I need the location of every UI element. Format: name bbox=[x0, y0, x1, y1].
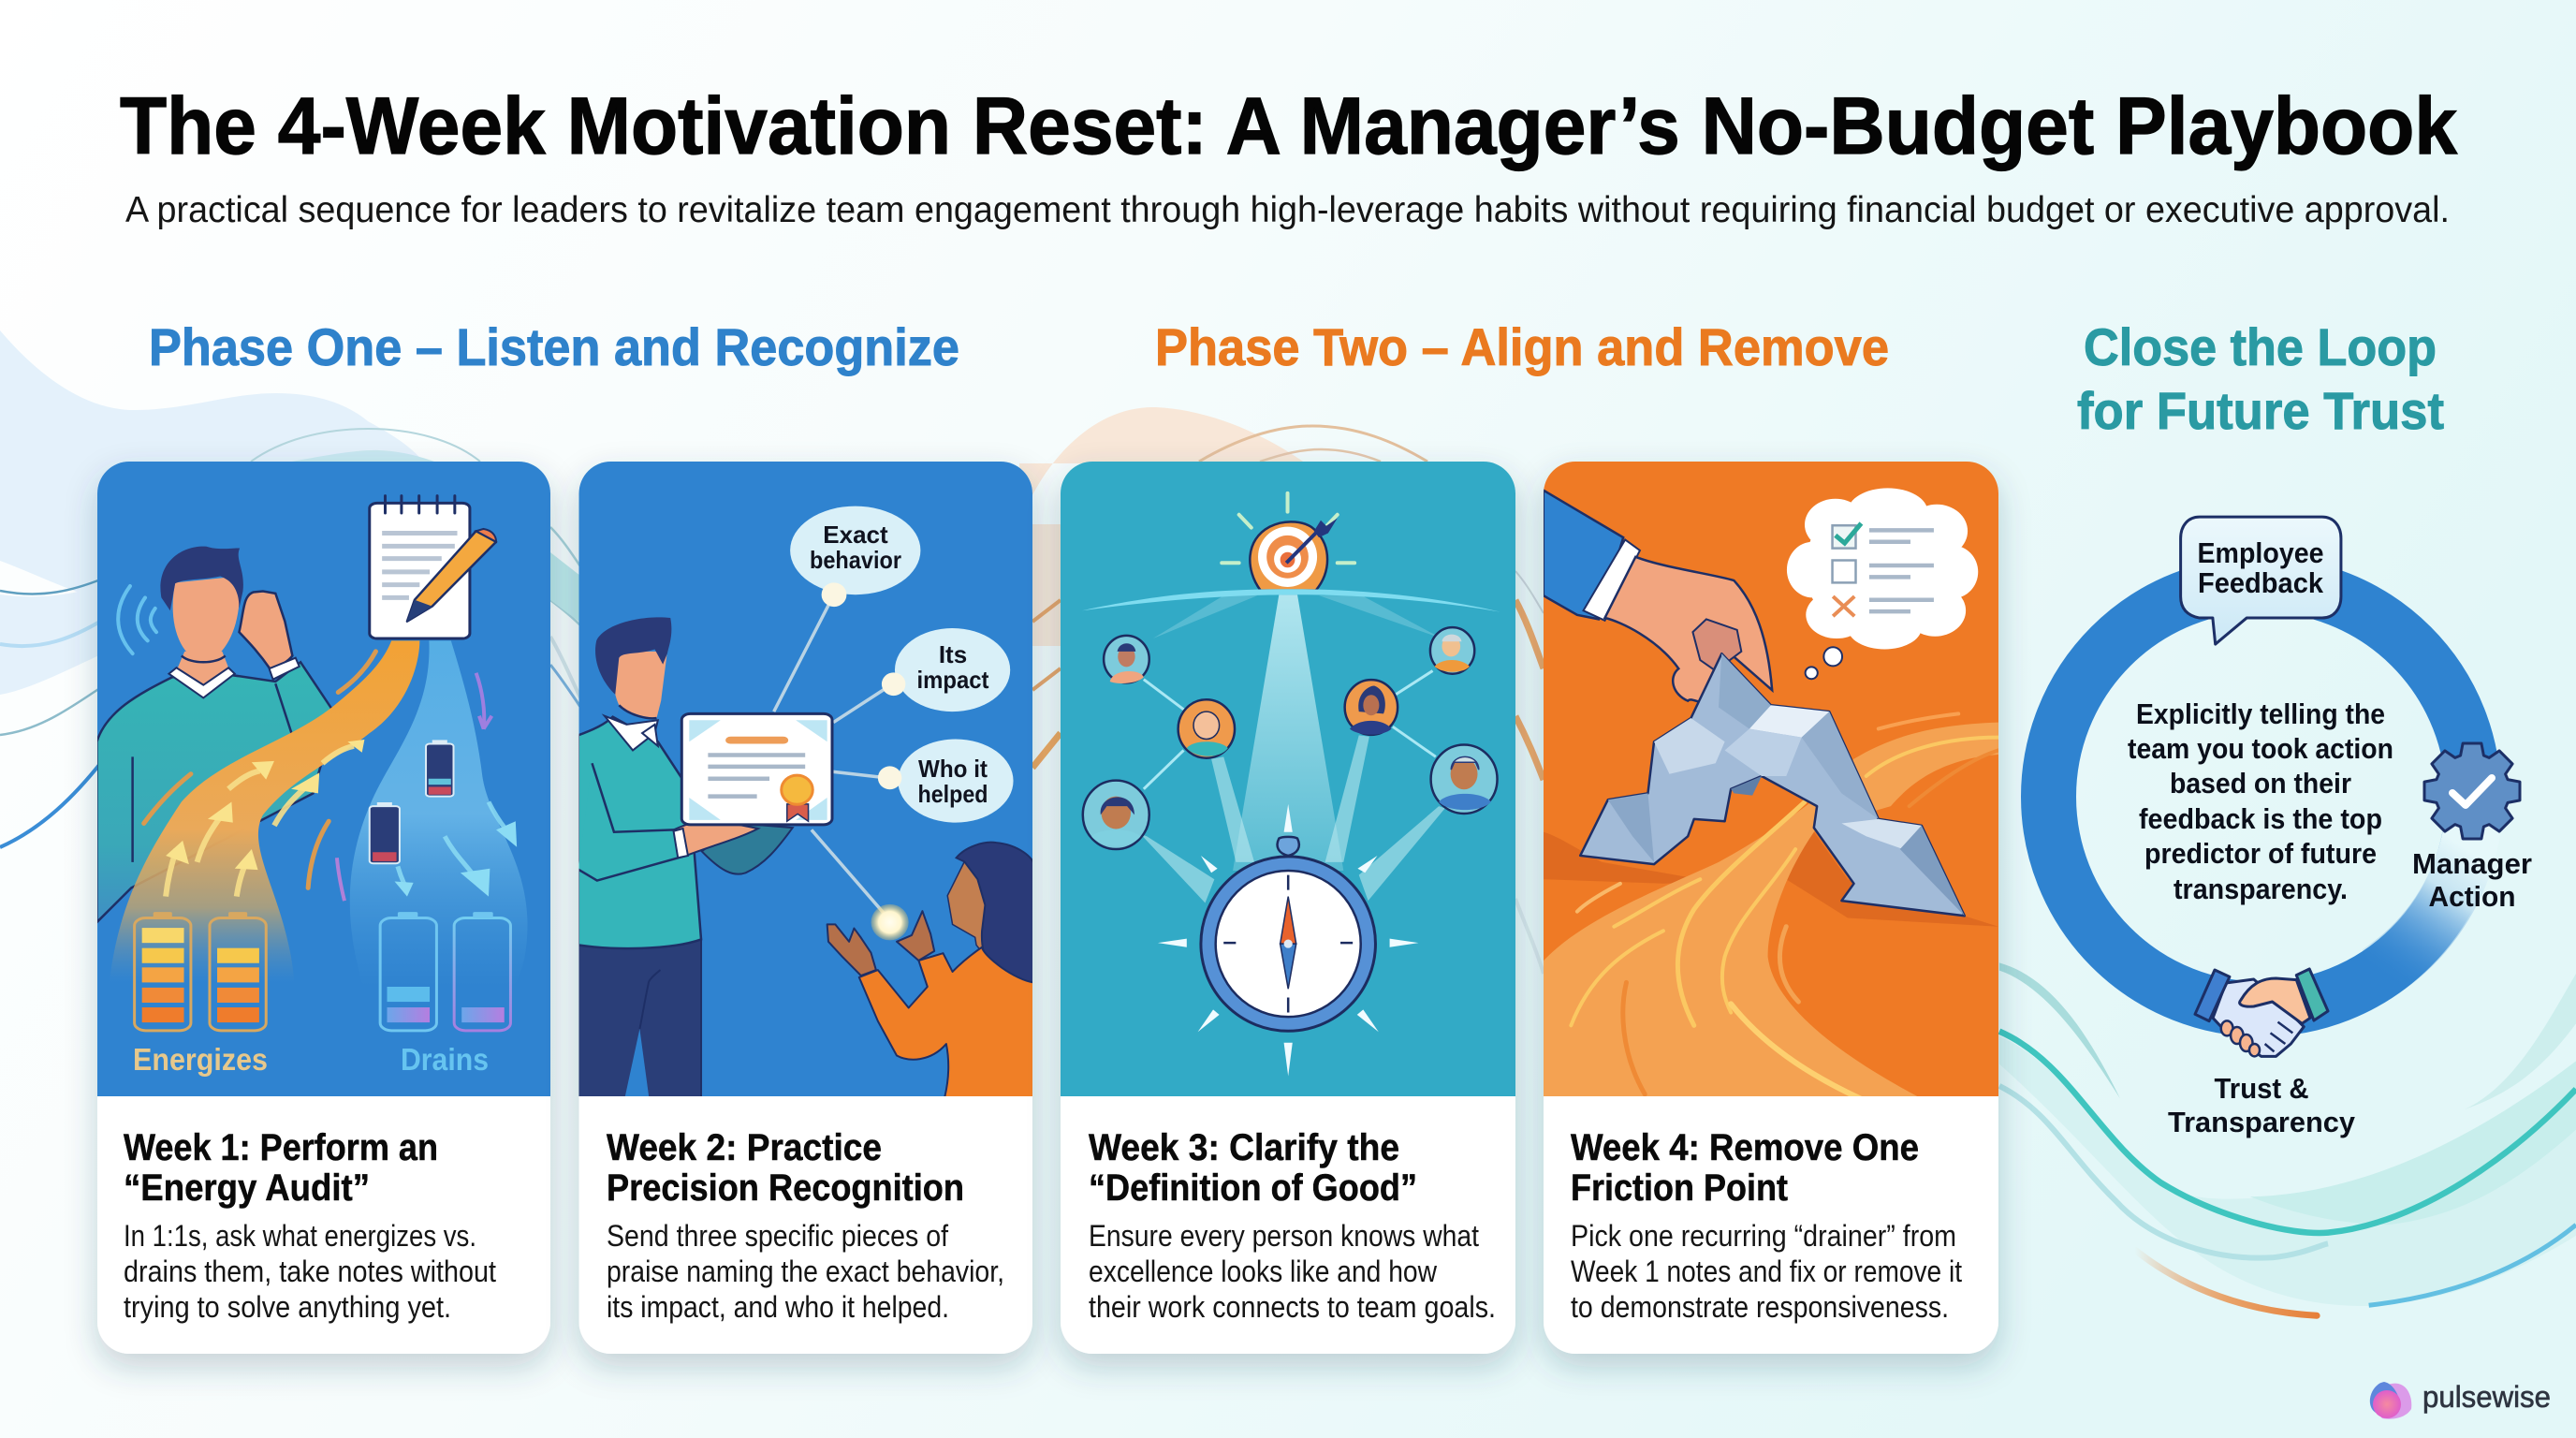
week 2 heading bbox=[607, 1127, 964, 1209]
loop centre text: team you took action bbox=[2128, 732, 2393, 765]
heading: close the loop: for Future Trust bbox=[2077, 381, 2444, 440]
label: manager action: Action bbox=[2428, 880, 2516, 913]
panel: feedback loop bbox=[2048, 517, 2532, 1138]
week 3 body: Ensure every person knows what bbox=[1089, 1219, 1479, 1253]
week 2 body: its impact, and who it helped. bbox=[607, 1290, 949, 1324]
illustration: precision recognition bbox=[578, 462, 1034, 1098]
week 3 body: excellence looks like and how bbox=[1089, 1255, 1438, 1288]
week 4 heading: Friction Point bbox=[1571, 1167, 1788, 1209]
week 4 body: Week 1 notes and fix or remove it bbox=[1571, 1255, 1962, 1288]
week 2 body: Send three specific pieces of bbox=[607, 1219, 948, 1253]
panel: week 2 card bbox=[578, 462, 1034, 1354]
panel: week 4 card bbox=[1544, 462, 1998, 1354]
label: manager action: Manager bbox=[2412, 847, 2532, 880]
bubble text: exact behavior: behavior bbox=[810, 546, 901, 574]
week 4 heading bbox=[1571, 1127, 1919, 1209]
illustration: removing friction rock bbox=[1544, 462, 1998, 1098]
logo: pulsewise: pulsewise bbox=[2422, 1380, 2551, 1414]
loop centre text: feedback is the top bbox=[2139, 802, 2382, 835]
week 1 body: trying to solve anything yet. bbox=[124, 1290, 451, 1324]
speech bubble: employee feedback: Employee bbox=[2198, 536, 2323, 569]
label: drains: Drains bbox=[401, 1042, 489, 1077]
subtitle: A practical sequence for leaders to revitalize team engagement through high-leverage habits without requiring financial budget or executive approval. bbox=[125, 190, 2450, 230]
label: trust and transparency: Trust & bbox=[2215, 1072, 2308, 1105]
label: energizes: Energizes bbox=[133, 1042, 268, 1077]
week 2 body: praise naming the exact behavior, bbox=[607, 1255, 1004, 1288]
illustration: energy audit bbox=[96, 462, 550, 1098]
week 4 body: to demonstrate responsiveness. bbox=[1571, 1290, 1949, 1324]
bubble text: exact behavior bbox=[811, 526, 901, 569]
bubble text: its impact: impact bbox=[917, 666, 989, 694]
week 1 body bbox=[124, 1219, 496, 1324]
week 2 heading: Week 2: Practice bbox=[607, 1127, 882, 1168]
week 1 body: drains them, take notes without bbox=[124, 1255, 496, 1288]
week 2 body bbox=[607, 1219, 1004, 1324]
logo: pulsewise bbox=[2370, 1380, 2551, 1419]
panel: week 3 card bbox=[1061, 462, 1515, 1354]
bubble text: who it helped: Who it bbox=[918, 755, 988, 783]
illustration: target and compass bbox=[1061, 462, 1515, 1098]
heading: phase one: Phase One – Listen and Recognize bbox=[149, 317, 959, 376]
loop centre text: predictor of future bbox=[2144, 837, 2377, 870]
week 1 heading bbox=[124, 1127, 438, 1209]
heading: close the loop bbox=[2077, 317, 2444, 440]
label: trust and transparency: Transparency bbox=[2168, 1106, 2356, 1138]
week 1 heading: “Energy Audit” bbox=[124, 1167, 370, 1209]
week 4 body: Pick one recurring “drainer” from bbox=[1571, 1219, 1956, 1253]
week 1 heading: Week 1: Perform an bbox=[124, 1127, 438, 1168]
week 1 body: In 1:1s, ask what energizes vs. bbox=[124, 1219, 476, 1253]
week 3 body: their work connects to team goals. bbox=[1089, 1290, 1496, 1324]
week 4 body bbox=[1571, 1219, 1962, 1324]
loop centre text bbox=[2128, 697, 2393, 905]
label: trust and transparency bbox=[2168, 1072, 2356, 1138]
title: The 4-Week Motivation Reset: A Manager’s No-Budget Playbook bbox=[120, 81, 2457, 171]
icon: gear with check bbox=[2424, 743, 2520, 839]
heading: close the loop: Close the Loop bbox=[2084, 317, 2437, 376]
week 4 heading: Week 4: Remove One bbox=[1571, 1127, 1919, 1168]
speech bubble: employee feedback bbox=[2181, 517, 2341, 644]
bubble text: its impact bbox=[918, 646, 988, 693]
week 3 heading bbox=[1089, 1127, 1417, 1209]
label: manager action bbox=[2412, 847, 2532, 913]
week 2 heading: Precision Recognition bbox=[607, 1167, 964, 1209]
bubble text: who it helped: helped bbox=[917, 780, 988, 808]
loop centre text: Explicitly telling the bbox=[2136, 697, 2385, 730]
loop centre text: based on their bbox=[2170, 767, 2351, 800]
week 3 heading: “Definition of Good” bbox=[1089, 1167, 1417, 1209]
bubble text: its impact: Its bbox=[939, 640, 967, 668]
icon: handshake bbox=[2195, 969, 2328, 1056]
week 3 heading: Week 3: Clarify the bbox=[1089, 1127, 1399, 1168]
bubble text: exact behavior: Exact bbox=[823, 521, 888, 549]
week 3 body bbox=[1089, 1219, 1496, 1324]
bubble text: who it helped bbox=[918, 759, 988, 807]
loop centre text: transparency. bbox=[2174, 873, 2348, 905]
speech bubble: employee feedback: Feedback bbox=[2198, 566, 2324, 599]
heading: phase two: Phase Two – Align and Remove bbox=[1155, 317, 1889, 376]
loop ring bbox=[2048, 584, 2474, 1009]
panel: week 1 card bbox=[96, 462, 550, 1354]
